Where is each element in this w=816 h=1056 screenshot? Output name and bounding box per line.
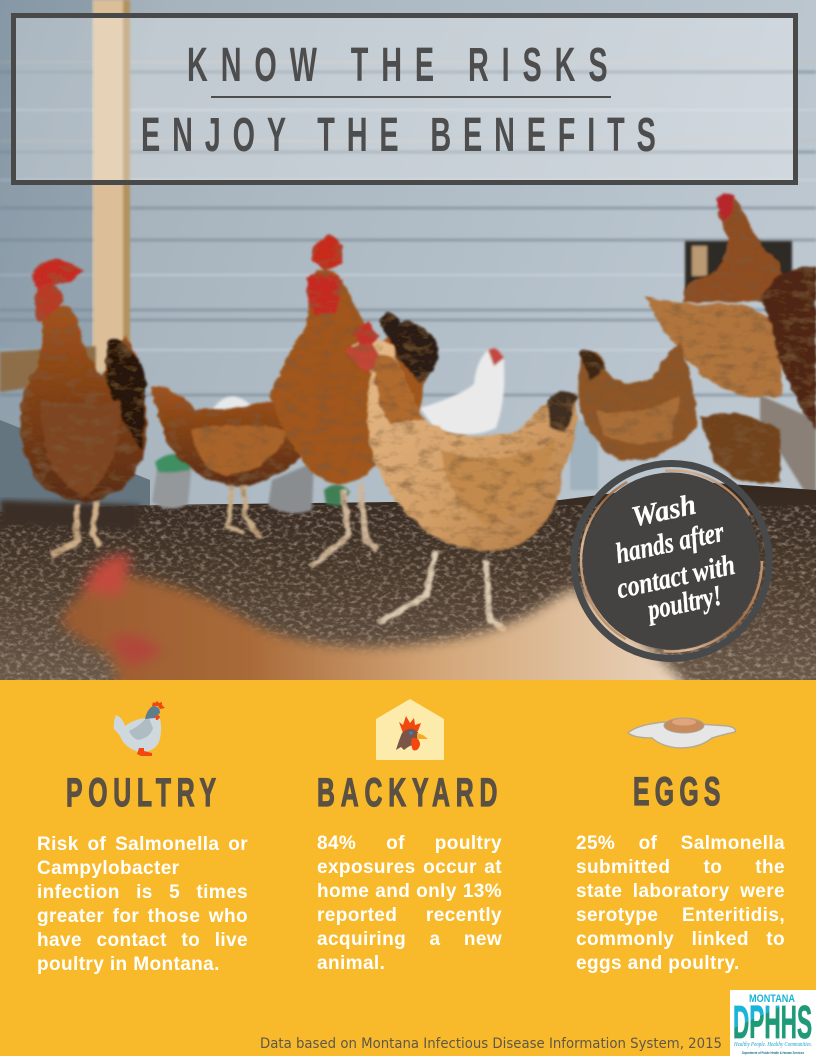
badge: wash hands: contact with xyxy=(614,549,738,605)
badge: wash hands: poultry! xyxy=(643,580,725,627)
white hen xyxy=(212,348,504,435)
text: eggs statistic: serotype Enteritidis, xyxy=(576,905,785,926)
text: backyard statistic: exposures occur at xyxy=(317,857,502,878)
text: poultry statistic: greater for those who xyxy=(37,906,248,927)
upper right hens xyxy=(645,194,816,483)
ground xyxy=(0,482,816,682)
heading: backyard: BACKYARD xyxy=(317,771,497,816)
title line 2: ENJOY THE BENEFITS xyxy=(141,109,656,162)
panel: yellow information band xyxy=(0,680,816,1056)
text: poultry statistic: Risk of Salmonella or xyxy=(37,834,248,855)
text: eggs statistic: eggs and poultry. xyxy=(576,953,740,974)
left rooster xyxy=(21,258,146,556)
badge: wash hands: Wash xyxy=(629,489,699,533)
brown hen, centre left xyxy=(150,386,308,538)
icon: hen xyxy=(114,701,165,756)
text: backyard statistic: reported recently xyxy=(317,905,502,926)
text: eggs statistic: commonly linked to xyxy=(576,929,785,950)
photo: chickens in a coop xyxy=(0,0,816,680)
icon: fried egg xyxy=(627,718,736,749)
text: backyard statistic: acquiring a new xyxy=(317,929,502,950)
coop wall xyxy=(0,0,816,520)
icon: rooster in house xyxy=(376,699,444,760)
centre rooster xyxy=(270,234,437,566)
text: eggs statistic: 25% of Salmonella xyxy=(576,833,785,854)
text: backyard statistic: home and only 13% xyxy=(317,881,502,902)
title panel xyxy=(14,16,796,182)
text: backyard statistic: animal. xyxy=(317,953,385,974)
nest box opening xyxy=(685,241,816,510)
badge: wash hands xyxy=(574,464,769,658)
text: poultry statistic: poultry in Montana. xyxy=(37,954,220,975)
text: poultry statistic: infection is 5 times xyxy=(37,882,248,903)
buckets and green feeder xyxy=(152,420,598,513)
text: backyard statistic xyxy=(317,833,502,974)
blurred foreground hen xyxy=(60,555,690,710)
centre tan hen xyxy=(344,322,578,630)
text: eggs statistic xyxy=(576,833,785,974)
heading: eggs: EGGS xyxy=(633,770,720,815)
text: backyard statistic: 84% of poultry xyxy=(317,833,502,854)
text: eggs statistic: submitted to the xyxy=(576,857,785,878)
wooden post xyxy=(0,0,130,392)
badge: wash hands: hands after xyxy=(613,516,727,570)
text: eggs statistic: state laboratory were xyxy=(576,881,785,902)
source note: Data based on Montana Infectious Disease Information System, 2015 xyxy=(260,1036,722,1052)
title line 1: KNOW THE RISKS xyxy=(187,39,608,92)
logo: Montana DPHHS: MONTANA xyxy=(749,993,795,1005)
text: poultry statistic: Campylobacter xyxy=(37,858,179,879)
heading: poultry: POULTRY xyxy=(66,771,216,816)
text: poultry statistic xyxy=(37,834,248,975)
text: poultry statistic: have contact to live xyxy=(37,930,248,951)
right brown hen xyxy=(578,342,697,460)
